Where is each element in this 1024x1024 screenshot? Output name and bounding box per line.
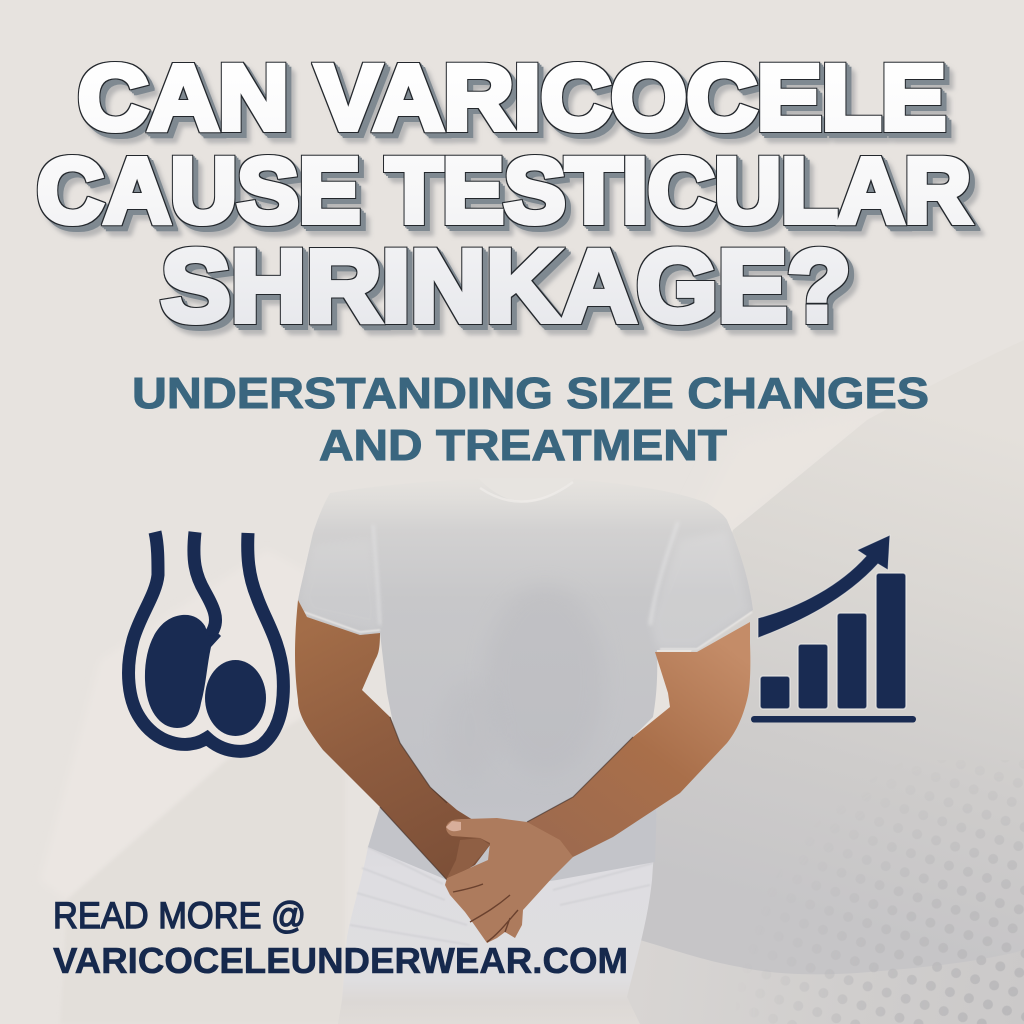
baseline (751, 716, 916, 722)
read more text: READ MORE @ (53, 895, 306, 936)
collar (480, 482, 573, 502)
arrow (758, 535, 890, 638)
left arm (295, 600, 497, 880)
man photo illustration (295, 478, 753, 1024)
right arm (500, 622, 750, 868)
arm shadow lines (380, 717, 633, 880)
subtitle (132, 369, 929, 470)
t-shirt (298, 479, 753, 822)
read more text: VARICOCELEUNDERWEAR.COM (53, 940, 628, 981)
shorts (338, 807, 657, 1024)
right testicle (205, 660, 266, 736)
background (627, 470, 1024, 1024)
outer scrotum outline (129, 532, 283, 751)
hands (445, 818, 573, 943)
neck (478, 478, 575, 502)
bars (760, 573, 906, 709)
subtitle: AND TREATMENT (319, 421, 727, 470)
icon: testicles anatomy (129, 532, 283, 751)
title: CAUSE TESTICULAR (37, 140, 971, 242)
title: SHRINKAGE? (161, 229, 851, 343)
icon: rising bar chart (751, 535, 916, 722)
subtitle: UNDERSTANDING SIZE CHANGES (132, 369, 929, 418)
left testicle (145, 615, 221, 728)
shirt shading and sleeves (300, 522, 752, 780)
title: CAN VARICOCELE (78, 47, 946, 149)
title (37, 47, 971, 343)
read more text (53, 895, 628, 981)
spermatic cord (194, 532, 216, 642)
shirt hem under arms (368, 800, 657, 885)
